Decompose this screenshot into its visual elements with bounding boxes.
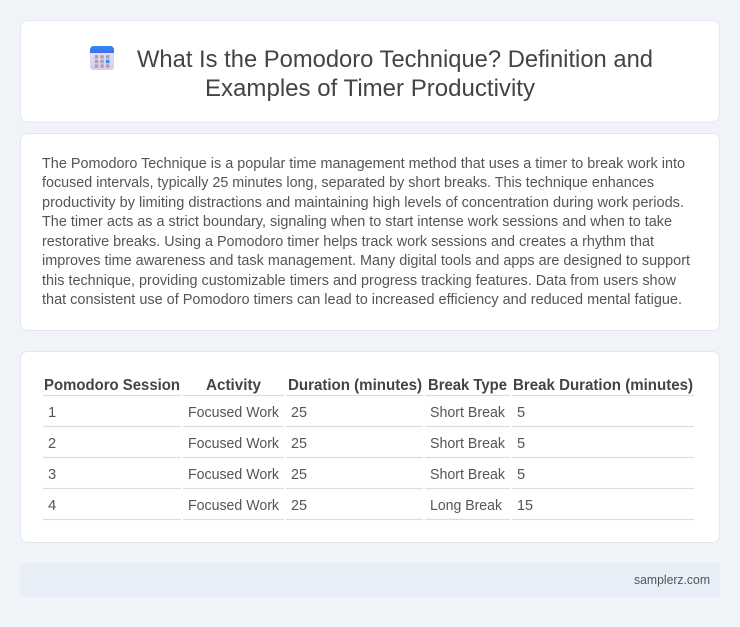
footer bar (20, 563, 720, 597)
table header row: Activity (206, 377, 261, 394)
footer source text: samplerz.com (634, 573, 710, 587)
table row 4: 15 (517, 498, 533, 514)
description text block: productivity by limiting distractions and maintaining high levels of concentration during work periods. (42, 195, 684, 211)
table row 2: 25 (291, 436, 307, 452)
description text block: The Pomodoro Technique is a popular time management method that uses a timer to break work into (42, 156, 685, 172)
table row 4: 4 (48, 498, 56, 514)
title (137, 46, 653, 102)
description text block: improves time awareness and task management. Many digital tools and apps are designed to support (42, 253, 690, 269)
table row 2: 2 (48, 436, 56, 452)
table header row: Break Duration (minutes) (513, 377, 693, 394)
table row 3: 3 (48, 467, 56, 483)
title: What Is the Pomodoro Technique? Definition and (137, 46, 653, 73)
table row 1: Short Break (430, 405, 506, 421)
table row 2: Short Break (430, 436, 506, 452)
description text block: focused intervals, typically 25 minutes long, separated by short breaks. This technique enhances (42, 175, 654, 191)
description text block: The timer acts as a strict boundary, signaling when to start intense work sessions and when to take (42, 214, 672, 230)
panel: table (20, 352, 720, 542)
table header row: Duration (minutes) (288, 377, 422, 394)
table row 3: Short Break (430, 467, 506, 483)
table row 2: Focused Work (188, 436, 280, 452)
description text block: this technique, providing customizable timers and progress tracking features. Data from users show (42, 273, 676, 289)
icon: calendar (90, 46, 114, 70)
table row 2: 5 (517, 436, 525, 452)
title: Examples of Timer Productivity (205, 75, 536, 102)
table row 4: Focused Work (188, 498, 280, 514)
table header row: Break Type (428, 377, 507, 394)
table header row: Pomodoro Session (44, 377, 180, 394)
table row 4: Long Break (430, 498, 503, 514)
description text block: restorative breaks. Using a Pomodoro timer helps track work sessions and creates a rhythm that (42, 234, 654, 250)
table header row (43, 377, 694, 396)
table row 2 (43, 436, 694, 458)
description text block (42, 156, 690, 308)
description text block: that consistent use of Pomodoro timers can lead to increased efficiency and reduced mental fatigue. (42, 292, 682, 308)
table row 1: 1 (48, 405, 56, 421)
table row 4: 25 (291, 498, 307, 514)
table row 3: 25 (291, 467, 307, 483)
table row 3 (43, 467, 694, 488)
table row 3: 5 (517, 467, 525, 483)
table row 1: 25 (291, 405, 307, 421)
table row 4 (43, 498, 694, 520)
table row 3: Focused Work (188, 467, 280, 483)
table row 1: Focused Work (188, 405, 280, 421)
panel: header (20, 20, 720, 122)
panel: description (20, 134, 720, 330)
table row 1 (43, 405, 694, 426)
table row 1: 5 (517, 405, 525, 421)
